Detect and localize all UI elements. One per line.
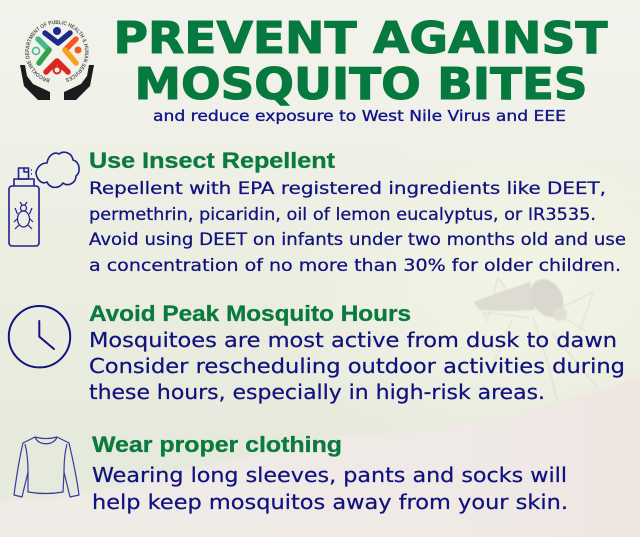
background: skin surface [0,375,640,537]
body text: Mosquitoes are most active from dusk to dawn [89,328,617,352]
body text: Consider rescheduling outdoor activities during [89,354,625,378]
body text [89,328,625,404]
section: wear proper clothing [92,432,568,514]
logo: Brookline Department of Public Health [20,20,94,100]
heading: Avoid Peak Mosquito Hours [89,301,411,326]
body text [89,179,626,275]
icon: clock [9,306,70,367]
title [114,13,608,110]
bug on can [14,202,33,229]
body text: Wearing long sleeves, pants and socks will [92,463,567,487]
heading: Use Insect Repellent [89,148,336,173]
body text: Repellent with EPA registered ingredients like DEET, [89,179,606,198]
logo arrows [38,33,76,72]
title: MOSQUITO BITES [134,59,588,110]
logo hands [20,65,94,100]
logo ring text: BROOKLINE DEPARTMENT OF PUBLIC HEALTH & HUMAN SERVICES [25,20,89,83]
body text: a concentration of no more than 30% for older children. [89,256,621,275]
body text: help keep mosquitos away from your skin. [92,490,568,514]
section: avoid peak mosquito hours [89,301,625,404]
body text: permethrin, picaridin, oil of lemon eucalyptus, or IR3535. [89,205,596,224]
subtitle: and reduce exposure to West Nile Virus and EEE [153,107,566,125]
icon: insect repellent spray can [9,152,79,246]
body text: Avoid using DEET on infants under two months old and use [89,230,626,249]
section: use insect repellent [89,148,626,275]
title: PREVENT AGAINST [114,13,608,64]
heading: Wear proper clothing [92,432,342,457]
background: faint mosquito [473,273,597,400]
logo small symbols [53,27,61,35]
body text: these hours, especially in high-risk areas. [89,380,545,404]
icon: long-sleeve shirt [14,437,79,497]
body text [92,463,568,514]
